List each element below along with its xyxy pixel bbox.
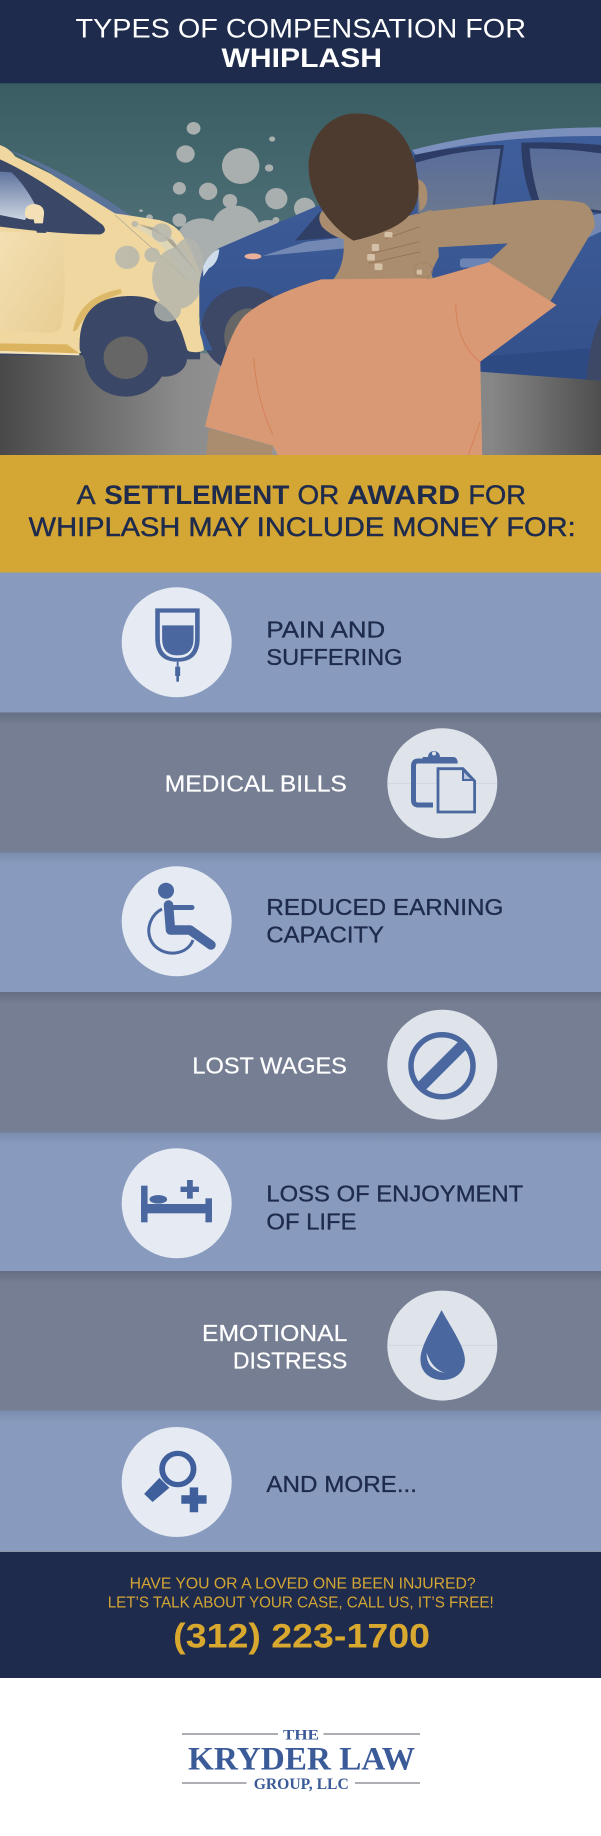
bumper lower [200,323,213,351]
roof strip [8,149,132,217]
call to action text: LET’S TALK ABOUT YOUR CASE, CALL US, IT’S FREE! [108,1594,494,1611]
smoke over yellow car [115,221,203,322]
illustration: car crash with injured person holding neck [0,83,601,457]
person: raised arm [427,200,595,305]
yellow car [0,145,204,397]
person: hair [309,113,419,241]
title banner [0,0,601,84]
call to action text: HAVE YOU OR A LOVED ONE BEEN INJURED? [130,1576,476,1592]
label: reduced earning capacity: REDUCED EARNING [266,894,503,920]
door handle [460,258,492,268]
window frame two [521,142,601,213]
label: loss of enjoyment of life: OF LIFE [266,1208,356,1234]
icon: clipboard and document [387,728,497,838]
person: shirt fold lines [254,303,480,455]
window glass two [530,148,601,211]
person: neck [333,213,433,280]
far wheel [162,359,187,377]
subtitle banner [0,455,601,572]
subtitle line 1: FOR [468,480,526,510]
sill trim [0,343,79,353]
panel: lost wages [0,992,601,1132]
panel: pain and suffering [0,572,601,712]
lower sill [481,348,601,381]
roof highlight [412,127,601,155]
phone number: (312) 223-1700 [173,1618,430,1656]
person [205,113,595,455]
title line: Whiplash: WHIPLASH [222,43,382,73]
subtitle line 1: SETTLEMENT [104,480,289,510]
label: and more: AND MORE... [266,1471,417,1497]
panel: loss of enjoyment of life [0,1132,601,1271]
label: reduced earning capacity: CAPACITY [266,922,384,948]
person: shirt [205,262,557,455]
window glass [0,172,35,220]
icon: tear drop [387,1291,497,1401]
icon: IV bag [122,587,232,697]
label: emotional distress [202,1320,348,1374]
sky background [0,83,601,367]
indicator [245,253,261,259]
door panel [0,232,65,333]
label: medical bills: MEDICAL BILLS [165,771,347,797]
call to action banner [0,1552,601,1678]
tire [84,360,162,397]
person: ear left [319,211,345,239]
windshield dark [295,212,337,241]
subtitle line 1: A [77,480,96,510]
window frame one [414,145,504,213]
blue car [199,127,601,381]
panel: medical bills [0,712,601,852]
smoke cloud [139,122,316,276]
subtitle line 1 [77,480,526,510]
wheel arch [80,296,188,367]
wheel arch trim [73,289,122,332]
mirror [25,204,44,223]
window glass one [416,149,501,213]
label: lost wages: LOST WAGES [192,1052,347,1078]
label: loss of enjoyment of life: LOSS OF ENJOYMENT [266,1181,523,1207]
hub [103,336,148,379]
wheel arch and tire [202,286,274,366]
panel: and more [0,1410,601,1551]
road [0,353,601,457]
label: loss of enjoyment of life [266,1181,523,1234]
icon: magnifier with plus [122,1427,232,1537]
call to action text [108,1576,494,1611]
label: pain and suffering [266,616,402,670]
logo: The Kryder Law Group, LLC: THE [283,1728,319,1744]
person: left arm [206,428,273,455]
subtitle line 1: OR [298,480,339,510]
car body [0,145,204,353]
person: fingernails [367,232,422,275]
window frame [0,159,105,234]
title line: Types of Compensation for: TYPES OF COMPENSATION FOR [76,13,526,43]
icon: hospital bed [122,1148,232,1258]
rear wheel arch [586,317,601,380]
under sill [0,352,82,356]
logo: The Kryder Law Group, LLC: GROUP, LLC [254,1776,349,1793]
logo: The Kryder Law Group, LLC [182,1728,420,1793]
icon: prohibited sign [387,1010,497,1120]
panel: reduced earning capacity [0,852,601,992]
headlight area [132,226,178,251]
subtitle line 2: WHIPLASH MAY INCLUDE MONEY FOR: [29,512,576,542]
subtitle line 1: AWARD [347,480,460,510]
body highlight [263,237,345,256]
label: emotional distress: DISTRESS [233,1348,347,1374]
headlight [203,249,219,277]
label: pain and suffering: PAIN AND [266,616,385,642]
panel: emotional distress [0,1271,601,1410]
icon: wheelchair [122,866,232,976]
person: finger lines [369,227,433,277]
label: reduced earning capacity [266,894,503,948]
person: hand [368,210,439,277]
label: pain and suffering: SUFFERING [266,644,402,670]
label: emotional distress: EMOTIONAL [202,1320,348,1346]
front bumper and body [199,128,601,381]
logo: The Kryder Law Group, LLC: KRYDER LAW [188,1741,415,1777]
person: ear right [418,179,427,212]
